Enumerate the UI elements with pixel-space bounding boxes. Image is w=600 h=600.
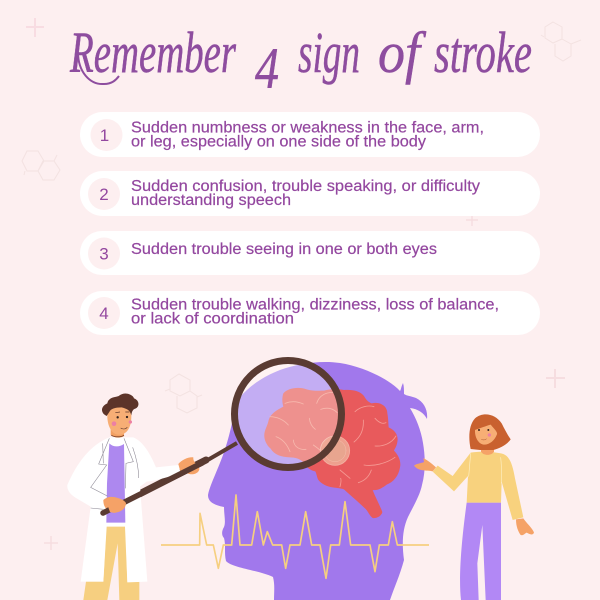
- panel: sign 1: or leg, especially on one side of the body: [131, 134, 426, 151]
- panel: sign 1: [80, 112, 540, 157]
- lens interior: [238, 365, 338, 464]
- title: of: [378, 20, 426, 85]
- ECG pulse line: [161, 495, 429, 578]
- magnifying glass: [140, 357, 345, 498]
- trousers: [83, 520, 139, 600]
- panel: sign 2: [80, 171, 540, 216]
- jumper: [433, 452, 523, 520]
- title: 4: [255, 36, 279, 101]
- woman figure: [414, 414, 534, 600]
- title: [69, 20, 532, 101]
- panel: sign 4: [80, 291, 540, 335]
- panel: sign 1: 1: [100, 126, 109, 145]
- neck and face: [111, 427, 124, 438]
- panel: sign 2: 2: [99, 185, 109, 204]
- head with brain: [208, 362, 427, 600]
- panel: sign 4: Sudden trouble walking, dizziness, loss of balance,: [131, 296, 499, 314]
- title: Remember: [69, 20, 236, 85]
- panel: sign 4: 4: [99, 304, 109, 323]
- neck: [481, 443, 494, 455]
- panel: sign 1: Sudden numbness or weakness in the face, arm,: [131, 120, 484, 137]
- coat lapels: [91, 438, 139, 509]
- hair: [469, 414, 511, 450]
- doctor figure: [67, 393, 199, 600]
- title: stroke: [434, 20, 532, 85]
- lab coat: [67, 437, 181, 582]
- hands: [414, 458, 436, 471]
- title: sign: [298, 20, 360, 85]
- panel: sign 4: or lack of coordination: [131, 310, 294, 328]
- hands: [103, 497, 125, 513]
- panel: sign 2: Sudden confusion, trouble speaking, or difficulty: [131, 178, 480, 195]
- panel: sign 3: [80, 231, 540, 275]
- cheeks and eyes: [112, 421, 116, 426]
- trousers: [460, 503, 501, 600]
- lens ring: [234, 360, 342, 468]
- panel: sign 2: understanding speech: [131, 192, 291, 209]
- panel: sign 3: 3: [99, 244, 109, 264]
- hair: [102, 393, 138, 416]
- face: [475, 425, 497, 445]
- doctor fingers: [106, 498, 126, 513]
- handle: [206, 443, 237, 461]
- handle grip: [103, 463, 202, 513]
- panel: sign 3: Sudden trouble seeing in one or both eyes: [131, 241, 437, 258]
- shirt: [106, 443, 125, 523]
- brain: [264, 388, 400, 518]
